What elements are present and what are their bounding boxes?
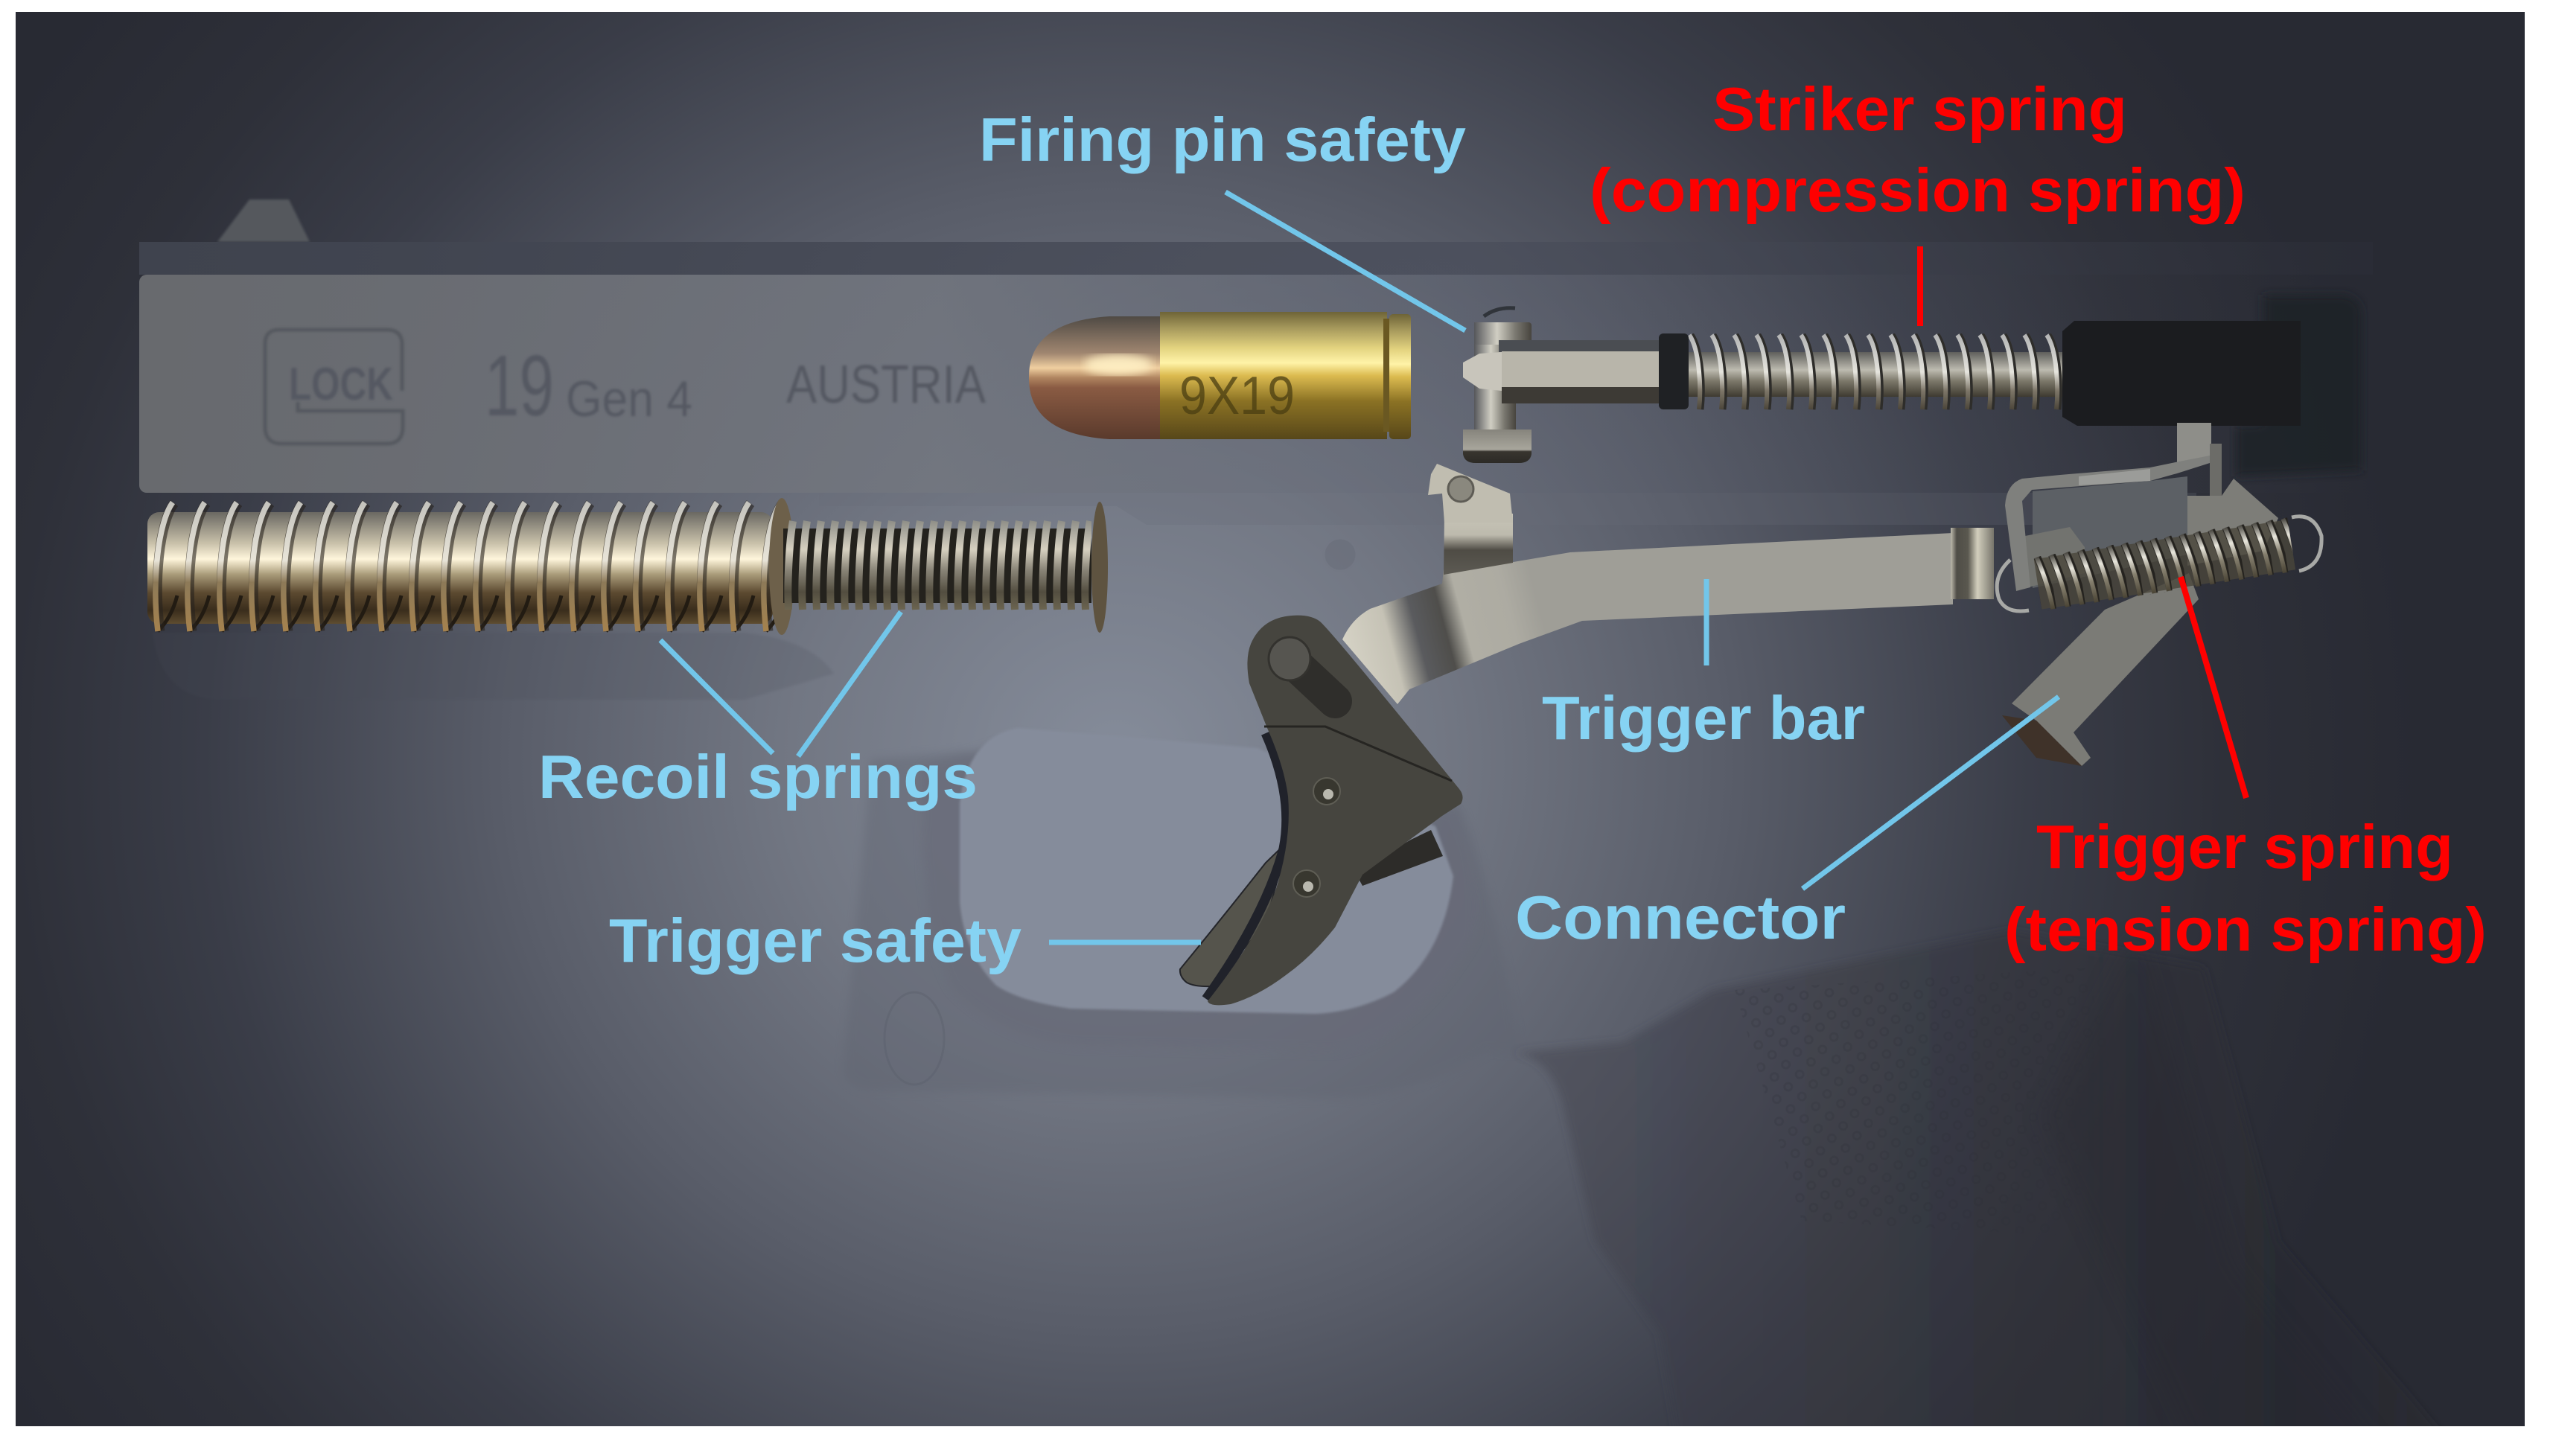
- striker assembly: [1463, 295, 2362, 476]
- trigger bar: [1342, 464, 1994, 704]
- ghost: rear sight: [217, 199, 310, 242]
- shaft main face: [1502, 351, 1663, 387]
- backing plate: [2033, 476, 2187, 588]
- rear housing shadow: [2236, 295, 2362, 476]
- small rod: [783, 529, 1091, 603]
- maker logo: [265, 330, 403, 444]
- generation: Gen 4: [566, 371, 692, 427]
- brass case: [1160, 312, 1387, 439]
- small coil spring: [783, 519, 1091, 612]
- leader: trigger safety: [1049, 939, 1201, 945]
- black collar: [1659, 333, 1689, 409]
- ghost: top band of slide: [139, 242, 1543, 275]
- ghost: grip rear shadow: [2040, 930, 2383, 1452]
- large coil spring: [147, 500, 782, 634]
- coil body: [2033, 517, 2296, 612]
- connector foot: [2002, 715, 2082, 766]
- upper screw: [1313, 778, 1340, 805]
- leader: trigger bar: [1703, 579, 1709, 665]
- thin post: [2210, 444, 2222, 496]
- ghost: trigger guard window: [960, 728, 1453, 1014]
- trigger spring (tension spring): [1997, 517, 2321, 612]
- ghost: trigger guard ring: [864, 756, 1199, 1064]
- connector triangle: [2187, 479, 2278, 566]
- maker logo: LOCK: [289, 359, 393, 410]
- cartridge: [1029, 312, 1411, 439]
- trigger safety blade: [1180, 841, 1288, 986]
- top cap: [1474, 322, 1532, 345]
- trigger body: [1208, 616, 1463, 1005]
- label: compression spring: (compression spring): [1590, 156, 2246, 225]
- label: connector: Connector: [1515, 883, 1846, 952]
- bent hook strip: [2005, 456, 2210, 591]
- ghost: lower frame band: [1859, 493, 2196, 525]
- rear trigger tail: [1355, 830, 1443, 886]
- ghost: frame pin: [1324, 538, 1357, 571]
- recoil spring assembly: [147, 498, 1108, 635]
- bar body: [1342, 533, 1953, 704]
- hook highlight: [2079, 469, 2150, 485]
- shaft lower face: [1502, 387, 1663, 403]
- nose highlight: [1084, 354, 1153, 375]
- leader: firing pin safety: [1225, 192, 1465, 331]
- connector arm: [2012, 573, 2199, 766]
- ghosted pistol outline behind the parts: [139, 191, 2323, 1276]
- end disc: [1091, 502, 1108, 633]
- extractor groove: [1383, 319, 1391, 432]
- bottom cap: [1463, 430, 1532, 463]
- country: AUSTRIA: [786, 355, 986, 415]
- label: trigger safety: Trigger safety: [609, 906, 1021, 975]
- leader: striker spring: [1917, 246, 1923, 326]
- small clip: [1484, 308, 1515, 316]
- ghost: guard pin: [885, 992, 944, 1085]
- shaft top face: [1499, 340, 1663, 352]
- ghost: grip stippling: [1735, 968, 2129, 1236]
- right hook ring: [2292, 517, 2321, 571]
- label: tension spring: (tension spring): [2004, 895, 2487, 964]
- safety tab stem: [1444, 514, 1513, 575]
- ghost: slide body: [139, 275, 1115, 493]
- label: trigger spring: Trigger spring: [2036, 812, 2453, 881]
- lower screw: [1293, 870, 1320, 897]
- leader: connector: [1803, 697, 2059, 889]
- striker coil spring: [1684, 333, 2074, 411]
- trigger: [1180, 616, 1463, 1005]
- left hook ring: [1997, 560, 2029, 611]
- ghost: trigger guard inner ring: [922, 744, 1476, 1051]
- leader: recoil spring large: [660, 640, 773, 753]
- tab dimple: [1448, 476, 1473, 502]
- case stamp: 9X19: [1179, 366, 1295, 426]
- pin slot: [1290, 659, 1335, 701]
- upper post: [2177, 423, 2211, 463]
- large rod: [147, 512, 773, 624]
- model number: 19: [485, 337, 554, 434]
- firing pin safety stem: [1474, 322, 1516, 434]
- body crease: [1264, 727, 1452, 781]
- black inner edge: [1206, 733, 1287, 999]
- safety tab head: [1428, 464, 1513, 523]
- spring flange: [769, 498, 794, 635]
- bar end hinge: [1951, 528, 1994, 599]
- hex head: [1463, 352, 1502, 391]
- ghost: dust cover: [804, 657, 829, 679]
- leader: trigger spring: [2181, 577, 2246, 798]
- rear black block: [2062, 321, 2301, 426]
- label: trigger bar: Trigger bar: [1542, 683, 1865, 753]
- backing plate lower block: [2025, 527, 2085, 588]
- ghost: pistol grip: [1527, 936, 2006, 1276]
- connector and cruciform: [2002, 423, 2278, 766]
- leader: recoil spring small: [798, 612, 901, 756]
- trigger pin: [1269, 637, 1310, 680]
- label: firing pin safety: Firing pin safety: [979, 105, 1466, 174]
- case rim: [1389, 314, 1411, 439]
- striker spring rod: [1684, 352, 2068, 397]
- label: recoil springs: Recoil springs: [538, 742, 978, 811]
- label: striker spring: Striker spring: [1712, 74, 2127, 144]
- bullet nose: [1029, 316, 1161, 439]
- engraved slide markings: [265, 330, 986, 444]
